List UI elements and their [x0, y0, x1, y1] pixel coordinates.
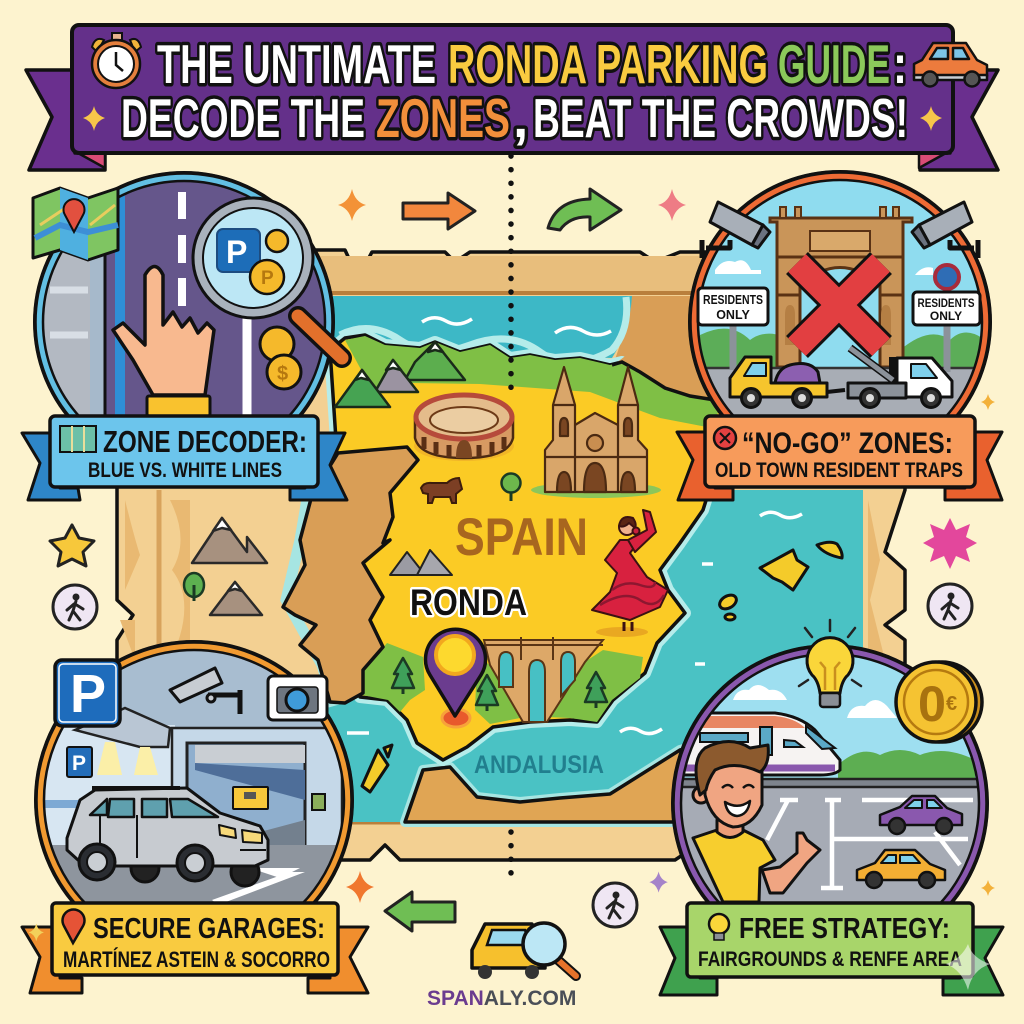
Ronda bridge — [484, 637, 603, 722]
side icon: yellow star — [50, 525, 94, 566]
sign left: ONLY — [716, 308, 750, 322]
pedestrian bottom — [593, 883, 637, 927]
coins — [260, 327, 301, 389]
ribbon: free strategy — [660, 903, 1003, 995]
waves — [422, 318, 611, 335]
flamenco dancer — [592, 510, 668, 637]
mountains parchment — [192, 518, 267, 615]
ribbon: garages — [22, 903, 368, 993]
sign right: ONLY — [930, 309, 962, 323]
car with magnifier — [472, 923, 576, 979]
circle frame — [36, 642, 352, 958]
scene — [682, 685, 978, 902]
magnifier — [193, 198, 342, 358]
circle frame — [690, 172, 990, 472]
coin: € — [946, 693, 957, 715]
scene — [44, 182, 324, 414]
label: RONDA: RONDA — [410, 582, 527, 623]
ribbon: no-go — [677, 416, 1002, 500]
subheading: FAIRGROUNDS & RENFE AREA — [698, 948, 962, 971]
icon: alarm clock — [92, 33, 141, 88]
land tan upper right — [612, 296, 710, 415]
sea north — [330, 296, 632, 358]
map icon — [33, 188, 118, 260]
mountains mid — [390, 550, 452, 575]
watermark sparkle — [946, 944, 990, 990]
parchment band bottom — [330, 820, 700, 824]
SUV — [67, 788, 268, 886]
P sign — [55, 660, 120, 726]
road line — [690, 367, 990, 369]
sparkles — [83, 106, 942, 131]
panel: secure garages — [22, 640, 368, 993]
star gold right — [981, 880, 995, 896]
star — [981, 394, 995, 410]
bull — [421, 478, 462, 503]
side icon: pink burst — [923, 518, 977, 569]
ribbon folds — [78, 153, 946, 168]
title line 2 — [121, 87, 908, 149]
label: ANDALUSIA: ANDALUSIA — [474, 751, 604, 779]
panel: zone decoder — [22, 170, 347, 500]
title line 2: ZONES — [376, 87, 510, 149]
sign left — [698, 288, 768, 370]
yellow sign — [233, 787, 268, 809]
subheading: BLUE VS. WHITE LINES — [88, 459, 282, 482]
magnifier: P — [226, 234, 247, 270]
dotted route line — [508, 156, 514, 885]
ribbon tails — [26, 70, 998, 170]
cars — [857, 796, 962, 888]
footer brand: SPANALY.COM — [427, 987, 576, 1010]
title line 1: THE UNTIMATE — [157, 33, 436, 95]
man — [693, 742, 820, 902]
islands — [362, 542, 842, 792]
Spain — [330, 335, 725, 760]
title line 2: , — [513, 87, 528, 149]
red X — [797, 263, 881, 347]
train — [680, 713, 840, 775]
parchment — [117, 250, 905, 860]
sea foam west — [286, 470, 334, 706]
title line 1 — [157, 33, 907, 95]
pin: Ronda — [426, 629, 486, 727]
icon: no — [714, 427, 736, 449]
green north — [345, 336, 722, 428]
camera icon — [268, 676, 327, 720]
lightbulb — [799, 620, 861, 707]
waves south — [347, 512, 802, 734]
scene — [690, 207, 990, 418]
tow truck left — [730, 357, 845, 408]
title line 2: DECODE THE — [121, 87, 365, 149]
Portugal — [283, 447, 418, 703]
P sign small: P — [72, 752, 86, 775]
title line 1: : — [893, 33, 907, 95]
heading: ZONE DECODER: — [103, 424, 307, 459]
cameras — [702, 202, 978, 258]
icon: bulb — [709, 914, 729, 940]
green box — [312, 794, 325, 810]
sign right — [913, 265, 980, 372]
arrow: orange — [403, 193, 475, 229]
sign left: RESIDENTS — [703, 293, 763, 307]
green south — [362, 643, 643, 724]
label: SPAIN: SPAIN — [455, 508, 588, 567]
star orange bottom — [346, 871, 374, 903]
side icon: pedestrian right — [928, 584, 972, 628]
icon: mini map — [60, 426, 96, 452]
tree on parchment — [184, 573, 204, 601]
subheading: OLD TOWN RESIDENT TRAPS — [715, 459, 963, 482]
tan south land — [405, 745, 700, 822]
P sign: P — [70, 664, 106, 724]
trees — [392, 658, 607, 711]
tree — [502, 474, 520, 501]
arrow: green curved — [548, 189, 621, 230]
panel: free strategy — [660, 620, 1003, 995]
P sign small — [67, 747, 92, 777]
parchment stains — [120, 500, 885, 660]
magnifier: P — [261, 268, 274, 289]
subheading: MARTÍNEZ ASTEIN & SOCORRO — [63, 947, 330, 972]
heading: “NO-GO” ZONES: — [742, 427, 953, 460]
sea south east — [322, 490, 863, 822]
circle frame — [35, 173, 333, 471]
decorative star pink — [658, 189, 686, 221]
tow truck right — [848, 348, 952, 408]
circle frame — [673, 646, 987, 960]
banner body — [72, 25, 953, 153]
fold line — [156, 490, 162, 660]
ribbon: zone decoder — [22, 416, 347, 500]
sign right: RESIDENTS — [918, 296, 974, 310]
side icon: pedestrian left — [53, 585, 97, 629]
hand — [113, 266, 214, 416]
star purple — [649, 872, 668, 893]
cctv — [170, 668, 240, 714]
heading: SECURE GARAGES: — [93, 913, 325, 945]
coin — [896, 662, 982, 742]
heading: FREE STRATEGY: — [739, 913, 950, 945]
land tan north east — [612, 345, 725, 400]
panel: no-go zones — [677, 172, 1002, 500]
bullring — [414, 395, 514, 461]
title line 1: RONDA PARKING — [448, 33, 768, 95]
map — [117, 250, 905, 860]
arrow: green left — [385, 892, 455, 931]
title line 1: GUIDE — [778, 33, 890, 95]
title banner — [26, 25, 998, 170]
star gold left — [29, 924, 44, 941]
coin symbol: $ — [277, 363, 288, 385]
icon: pin — [63, 909, 84, 943]
icon: car — [914, 43, 987, 86]
cathedral — [531, 367, 661, 498]
scene — [45, 651, 343, 902]
mountains north — [335, 342, 465, 407]
arch — [770, 218, 912, 367]
decorative star orange — [338, 189, 366, 221]
coin: 0 — [918, 676, 946, 732]
sea shore foam — [340, 297, 627, 363]
parchment band top — [318, 256, 708, 294]
